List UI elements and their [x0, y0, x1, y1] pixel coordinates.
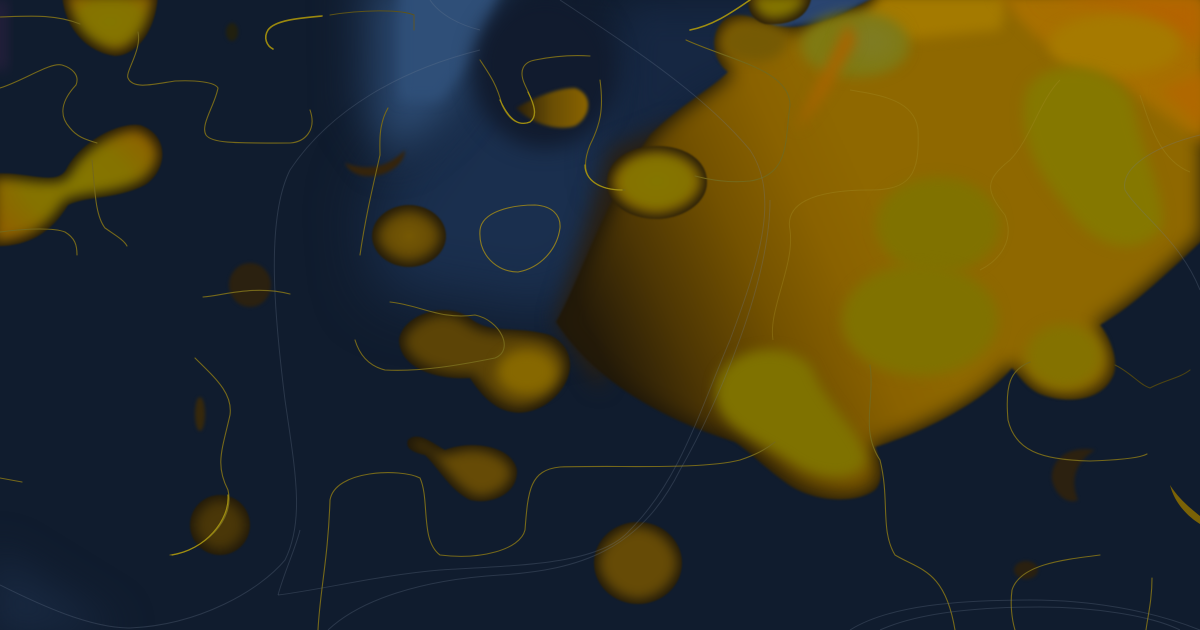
blob: top centre small	[516, 88, 588, 128]
olive peninsula highlight	[715, 350, 866, 477]
thin gold outline loop	[480, 205, 560, 272]
blob: central round	[372, 205, 446, 267]
olive highlights	[801, 13, 909, 77]
blob: lower left round	[190, 495, 250, 555]
blob: left of mass	[607, 146, 707, 219]
blob: teardrop	[407, 437, 517, 501]
blob: bottom round	[594, 522, 682, 604]
blue glow shapes	[0, 0, 880, 630]
bright gold curve accents	[172, 0, 750, 555]
blob: top of mass	[748, 0, 812, 24]
main amber mass	[556, 0, 1200, 499]
right lobe highlight	[1026, 324, 1102, 388]
blob: double at upper left	[0, 125, 162, 246]
top amber lobe	[723, 22, 787, 62]
blob: centre double	[399, 310, 570, 413]
blob: top left	[62, 0, 158, 56]
faint gold curves on amber mass	[772, 80, 1190, 340]
orange top right	[860, 0, 1010, 40]
small dark blobs	[195, 23, 1200, 579]
